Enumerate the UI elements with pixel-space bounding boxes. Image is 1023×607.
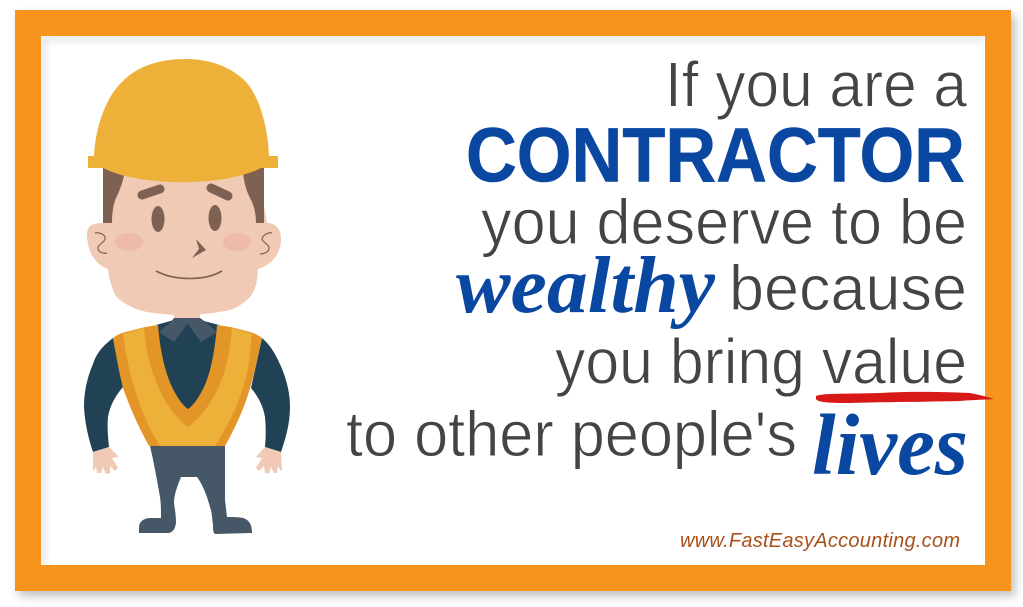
word: wealthy: wealthy (456, 240, 716, 330)
neck (174, 305, 200, 327)
mouth (156, 271, 222, 278)
head (87, 168, 281, 315)
line: to other people's: to other people's (346, 398, 797, 470)
line: if you are a: If you are a (665, 48, 967, 120)
eyebrows (142, 188, 228, 196)
worker character (84, 59, 290, 534)
line: you bring value: you bring value (555, 326, 967, 398)
headline text (346, 48, 994, 493)
arms (84, 338, 290, 452)
website url: www.FastEasyAccounting.com (680, 530, 960, 552)
eyes (152, 205, 222, 232)
trousers (139, 446, 252, 534)
red underline (816, 392, 994, 403)
hard hat (88, 59, 278, 182)
word: lives: lives (812, 396, 968, 493)
collar (159, 318, 217, 342)
line: contractor: CONTRACTOR (466, 112, 965, 198)
nose (192, 239, 206, 258)
hair (103, 168, 125, 223)
word: because: because (729, 252, 967, 324)
cheeks (115, 233, 251, 251)
shirt (154, 320, 222, 414)
face (87, 170, 281, 315)
safety vest (113, 325, 262, 446)
line: you deserve to be: you deserve to be (481, 186, 967, 258)
ears detail (95, 233, 272, 254)
hands (93, 447, 282, 474)
